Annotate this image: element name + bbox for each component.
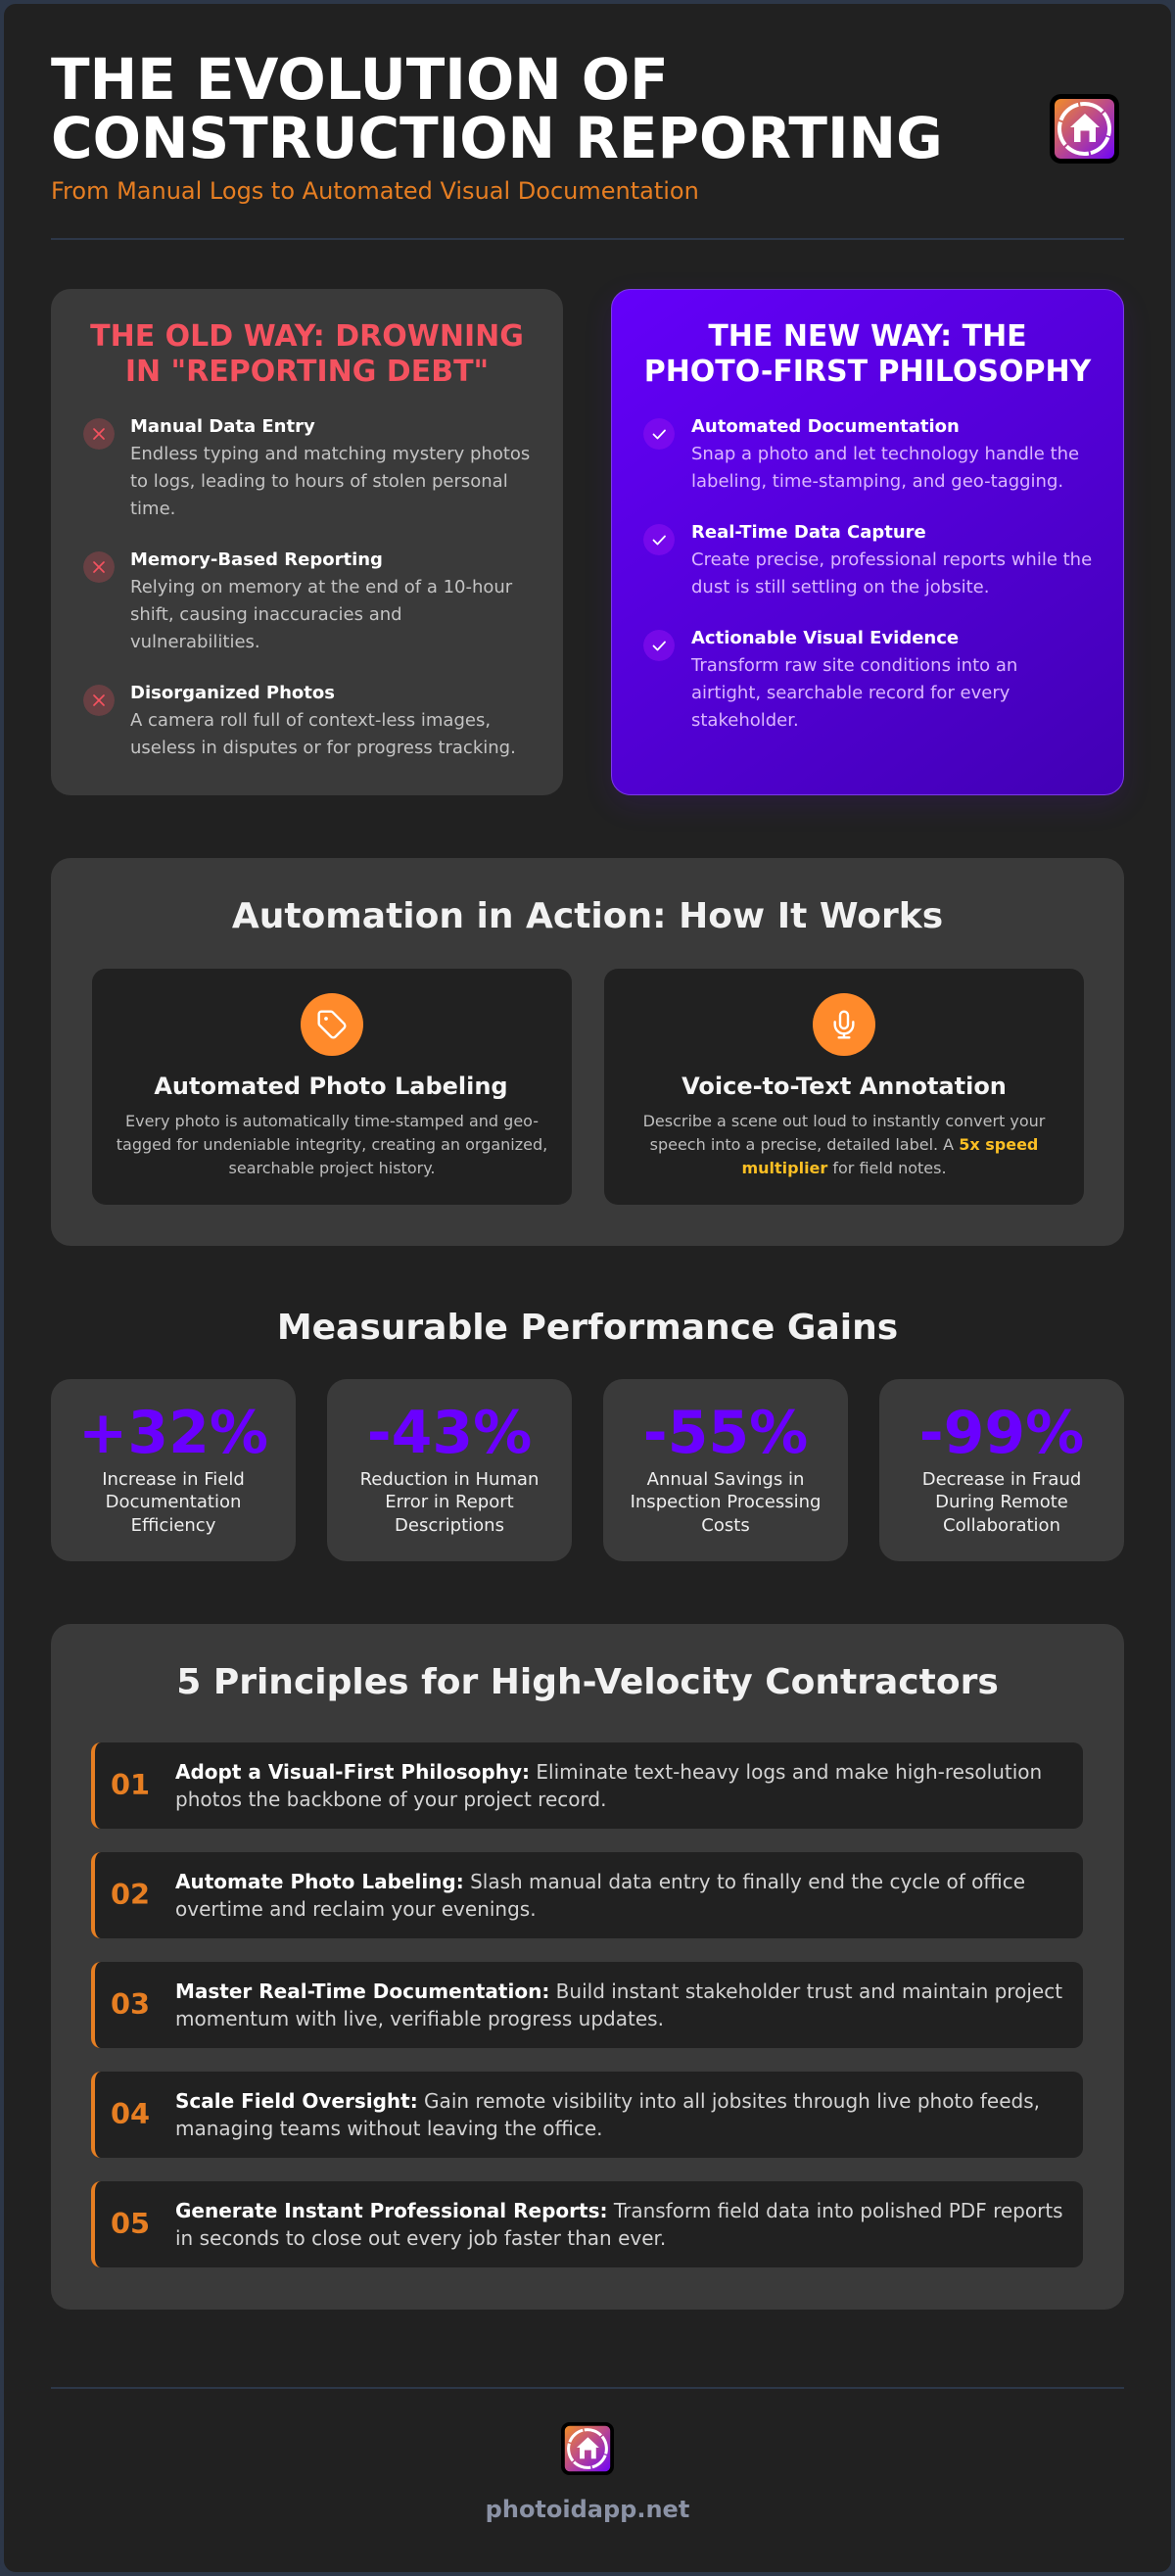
number: 04 — [111, 2096, 150, 2129]
principle text — [175, 1870, 1025, 1921]
number: 05 — [111, 2206, 150, 2239]
principle text — [175, 2089, 1040, 2140]
card: automated photo labeling — [92, 969, 572, 1205]
number: 03 — [111, 1986, 150, 2020]
card text — [117, 1112, 547, 1177]
card: voice-to-text annotation — [604, 969, 1084, 1205]
panel: 5 principles — [51, 1624, 1124, 2310]
card text: searchable project history. — [229, 1159, 435, 1177]
principle text — [175, 2199, 1063, 2250]
principle text — [175, 1760, 1042, 1811]
heading: 5 principles: 5 Principles for High-Velocity Contractors — [176, 1662, 999, 1702]
stat label: Efficiency — [131, 1515, 215, 1536]
item text — [691, 444, 1079, 492]
title — [51, 46, 943, 170]
item: actionable visual evidence — [643, 628, 1017, 731]
stat label: Descriptions — [395, 1515, 504, 1536]
number: 01 — [111, 1767, 150, 1800]
stat label — [631, 1469, 821, 1536]
stat number: -55% — [643, 1399, 808, 1467]
icon: check mark — [643, 524, 675, 555]
icon: header logo — [1050, 94, 1119, 164]
principle 01 — [91, 1742, 1083, 1829]
stat label: Collaboration — [943, 1515, 1060, 1536]
icon: x mark — [83, 418, 115, 450]
item text: stakeholder. — [691, 710, 799, 731]
header — [51, 46, 943, 205]
item text — [691, 549, 1092, 597]
icon: x mark — [83, 551, 115, 583]
item text: shift, causing inaccuracies and — [130, 604, 402, 625]
stat label: Costs — [701, 1515, 750, 1536]
item: memory-based reporting — [83, 549, 513, 652]
item title: Memory-Based Reporting — [130, 549, 383, 570]
item: real-time data capture — [643, 522, 1092, 597]
subtitle: From Manual Logs to Automated Visual Documentation — [51, 177, 699, 205]
principle text: photos the backbone of your project record. — [175, 1788, 606, 1811]
card text — [643, 1112, 1046, 1177]
card title: Automated Photo Labeling — [154, 1073, 508, 1100]
header divider — [51, 238, 1124, 240]
title: CONSTRUCTION REPORTING — [51, 104, 943, 170]
item: manual data entry — [83, 416, 530, 519]
footer url: photoidapp.net — [486, 2496, 689, 2523]
stat card: -55% — [603, 1379, 848, 1561]
stat number: -43% — [367, 1399, 532, 1467]
panel: the old way — [51, 289, 563, 795]
heading: new way — [644, 319, 1091, 389]
icon: footer logo — [561, 2422, 614, 2475]
stat label: Error in Report — [385, 1492, 514, 1512]
number: 02 — [111, 1877, 150, 1910]
icon: tag — [301, 993, 363, 1056]
principle 03 — [91, 1962, 1083, 2048]
item title: Real-Time Data Capture — [691, 522, 926, 543]
item text — [130, 577, 513, 652]
stat label: Reduction in Human — [360, 1469, 539, 1490]
panel: automation in action — [51, 858, 1124, 1246]
item text: useless in disputes or for progress tracking. — [130, 738, 516, 758]
icon: microphone — [813, 993, 875, 1056]
item title: Actionable Visual Evidence — [691, 628, 959, 648]
stat label — [922, 1469, 1081, 1536]
footer divider — [51, 2387, 1124, 2389]
principle text: Master Real-Time Documentation: Build instant stakeholder trust and maintain project — [175, 1980, 1062, 2003]
stat label: Inspection Processing — [631, 1492, 821, 1512]
heading: new way: THE NEW WAY: THE — [708, 319, 1027, 354]
heading: old way: THE OLD WAY: DROWNING — [90, 319, 524, 353]
principle text: Automate Photo Labeling: Slash manual data entry to finally end the cycle of office — [175, 1870, 1025, 1893]
principle text: Generate Instant Professional Reports: Transform field data into polished PDF reports — [175, 2199, 1063, 2222]
heading: old way — [90, 319, 524, 388]
principle text: managing teams without leaving the office. — [175, 2117, 603, 2140]
item: disorganized photos — [83, 683, 516, 758]
heading: automation in action: Automation in Action: How It Works — [232, 896, 943, 936]
icon: check mark — [643, 630, 675, 661]
stat label: Decrease in Fraud — [922, 1469, 1081, 1490]
stat card: -99% — [879, 1379, 1124, 1561]
heading: performance gains: Measurable Performance Gains — [277, 1308, 898, 1348]
stat number: -99% — [919, 1399, 1084, 1467]
principle 05 — [91, 2181, 1083, 2267]
item title: Disorganized Photos — [130, 683, 335, 703]
item text — [130, 710, 516, 758]
principle text: Scale Field Oversight: Gain remote visibility into all jobsites through live photo feeds, — [175, 2089, 1040, 2113]
title: THE EVOLUTION OF — [51, 46, 669, 113]
stat card: +32% — [51, 1379, 296, 1561]
item text: Transform raw site conditions into an — [691, 655, 1017, 676]
icon: x mark — [83, 685, 115, 716]
stat label: Documentation — [106, 1492, 241, 1512]
heading: new way: PHOTO-FIRST PHILOSOPHY — [644, 355, 1091, 389]
card text: Every photo is automatically time-stamped and geo- — [125, 1112, 539, 1130]
panel: the new way — [611, 289, 1124, 795]
stat label: Increase in Field — [102, 1469, 245, 1490]
stat number: +32% — [78, 1399, 268, 1467]
item text: Snap a photo and let technology handle the — [691, 444, 1079, 464]
item text: Relying on memory at the end of a 10-hour — [130, 577, 512, 597]
item title: Manual Data Entry — [130, 416, 315, 437]
card text: multiplier for field notes. — [741, 1159, 947, 1177]
item text: A camera roll full of context-less images, — [130, 710, 491, 731]
stat label — [360, 1469, 539, 1536]
item text — [691, 655, 1017, 731]
principle text — [175, 1980, 1062, 2030]
stat label: During Remote — [935, 1492, 1068, 1512]
principle 02 — [91, 1852, 1083, 1938]
stat card: -43% — [327, 1379, 572, 1561]
card text: tagged for undeniable integrity, creating an organized, — [117, 1135, 547, 1154]
principle text: in seconds to close out every job faster than ever. — [175, 2226, 666, 2250]
principle 04 — [91, 2072, 1083, 2158]
card text: Describe a scene out loud to instantly convert your — [643, 1112, 1045, 1130]
item text: time. — [130, 499, 175, 519]
principle text: overtime and reclaim your evenings. — [175, 1897, 537, 1921]
item title: Automated Documentation — [691, 416, 960, 437]
item text: vulnerabilities. — [130, 632, 260, 652]
item text: airtight, searchable record for every — [691, 683, 1010, 703]
icon: check mark — [643, 418, 675, 450]
stat label — [102, 1469, 245, 1536]
stat label: Annual Savings in — [647, 1469, 804, 1490]
card title: Voice-to-Text Annotation — [682, 1073, 1007, 1100]
item text: dust is still settling on the jobsite. — [691, 577, 989, 597]
section: measurable performance gains — [51, 1308, 1124, 1561]
item text: Create precise, professional reports while the — [691, 549, 1092, 570]
item: automated documentation — [643, 416, 1079, 492]
heading: old way: IN "REPORTING DEBT" — [125, 355, 489, 388]
card text: speech into a precise, detailed label. A 5x speed — [650, 1135, 1038, 1154]
item text: Endless typing and matching mystery photos — [130, 444, 530, 464]
principle text: momentum with live, verifiable progress updates. — [175, 2007, 664, 2030]
item text: labeling, time-stamping, and geo-tagging. — [691, 471, 1063, 492]
principle text: Adopt a Visual-First Philosophy: Eliminate text-heavy logs and make high-resolution — [175, 1760, 1042, 1784]
item text — [130, 444, 530, 519]
item text: to logs, leading to hours of stolen personal — [130, 471, 508, 492]
